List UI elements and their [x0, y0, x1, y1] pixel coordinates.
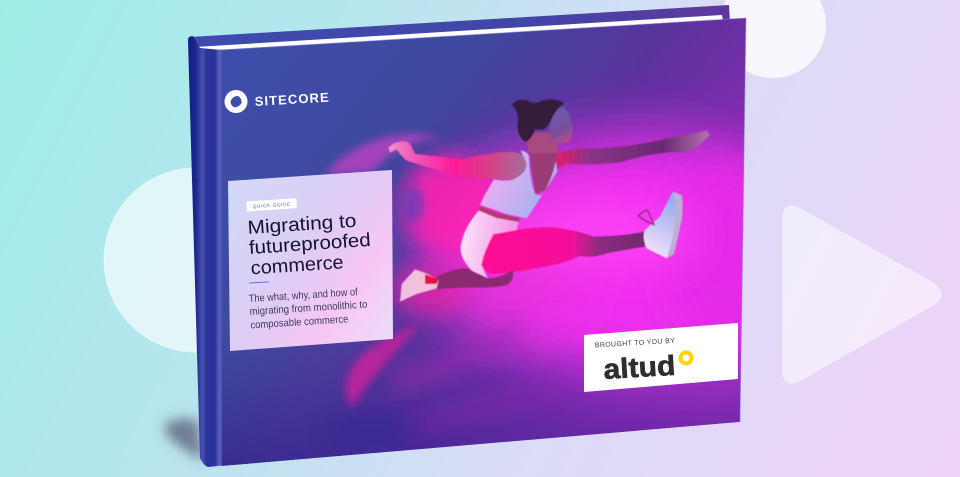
front cover: [222, 18, 800, 466]
back cover: [190, 5, 730, 54]
logo: Sitecore: SITECORE: [254, 90, 329, 109]
description: migrating from monolithic to: [249, 299, 368, 318]
book: [188, 5, 800, 467]
chest: [527, 145, 557, 194]
heading: Migrating to: [247, 211, 357, 239]
front shoe: [644, 192, 682, 258]
heading: [247, 210, 373, 279]
back shoe heel: [425, 274, 439, 284]
heading: futureproofed: [248, 230, 371, 259]
divider: [249, 282, 269, 283]
motion swirls: [325, 134, 440, 176]
arm left: [388, 141, 527, 179]
bottom shading: [222, 340, 746, 466]
shorts: [461, 211, 519, 279]
panel: title card: [228, 170, 393, 351]
logo: altudo: altud: [603, 350, 676, 385]
description: composable commerce: [250, 313, 349, 331]
logo: Sitecore: [225, 90, 329, 113]
athlete figure: [388, 99, 710, 302]
back shoe: [400, 269, 439, 302]
description: The what, why, and how of: [248, 286, 358, 305]
neck: [527, 132, 558, 153]
description: [248, 286, 369, 331]
tag: quick guide: QUICK GUIDE: [253, 202, 291, 210]
spine: [188, 36, 228, 467]
magenta glow: [460, 135, 800, 375]
shoe sole: [667, 192, 683, 258]
cover edge highlight: [222, 18, 746, 422]
tag: quick guide: [246, 198, 297, 211]
icon: Sitecore ring: [225, 90, 248, 113]
waistband: [479, 207, 520, 222]
logo: yellow ring: [680, 352, 692, 364]
sponsor card: [584, 323, 738, 392]
shoe laces: [639, 210, 655, 225]
book shadow: [164, 418, 204, 462]
decorative play triangle: [783, 206, 941, 383]
arm right: [557, 131, 710, 169]
face: [549, 107, 573, 143]
decorative circle top right: [720, 0, 826, 78]
heading: commerce: [250, 252, 344, 279]
back leg: [437, 268, 513, 289]
front leg: [481, 227, 645, 274]
top garment: [480, 151, 557, 218]
hair: [512, 99, 564, 142]
decorative circle left: [104, 168, 288, 352]
pages: [195, 15, 723, 51]
sponsor caption: BROUGHT TO YOU BY: [595, 338, 675, 349]
